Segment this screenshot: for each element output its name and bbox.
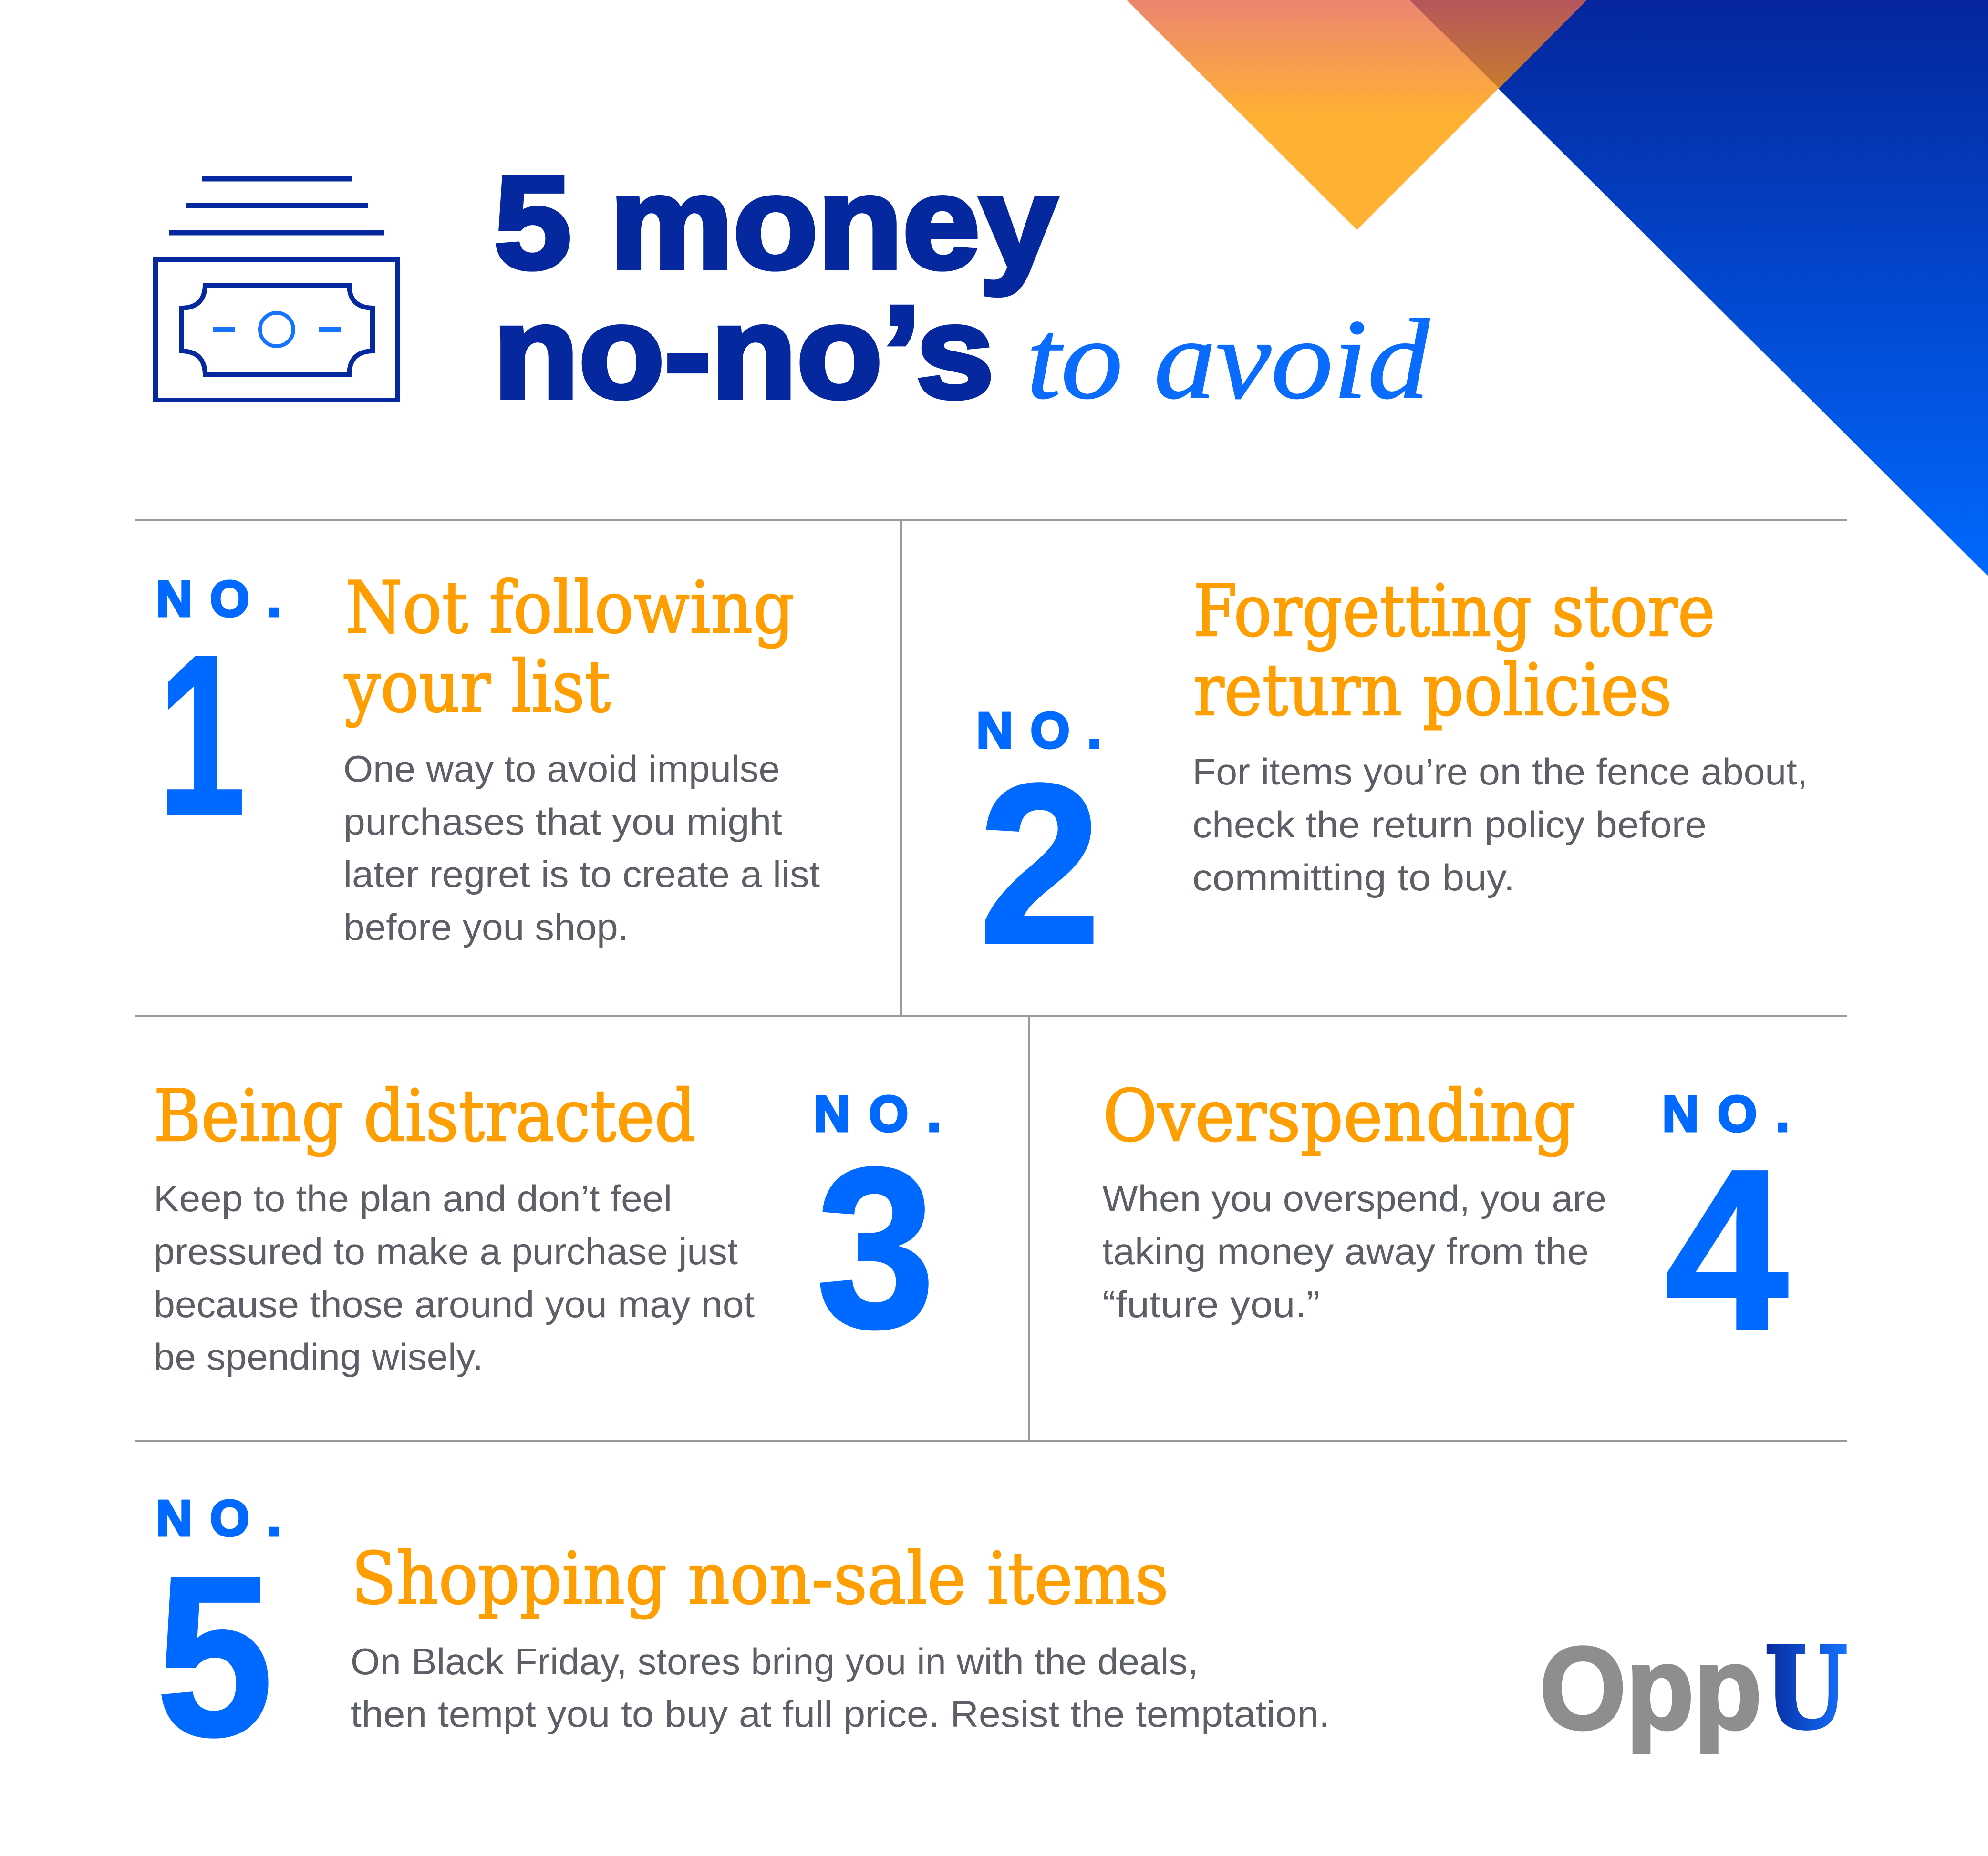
- logo: OppU: U: [1765, 1623, 1847, 1754]
- title: no-no’s: [493, 279, 994, 425]
- heading 2: return policies: [1193, 649, 1672, 732]
- body text 3: be spending wisely.: [154, 1336, 483, 1378]
- heading 1: [344, 567, 795, 729]
- body text 5: then tempt you to buy at full price. Resist the temptation.: [351, 1693, 1330, 1735]
- number label 2: 2: [979, 737, 1101, 991]
- body text 5: On Black Friday, stores bring you in with the deals,: [351, 1640, 1198, 1682]
- body text 1: before you shop.: [343, 906, 629, 948]
- heading 5: Shopping non-sale items: [352, 1537, 1169, 1620]
- title: [493, 150, 1430, 425]
- heading 2: [1193, 570, 1715, 732]
- panel: no. 3: [154, 1075, 941, 1378]
- number label 1: NO.: [156, 571, 281, 627]
- number label 1: 1: [158, 608, 245, 863]
- title: 5 money: [494, 150, 1058, 297]
- body text 3: [154, 1177, 755, 1378]
- body text 3: pressured to make a purchase just: [154, 1230, 738, 1272]
- number label 5: 5: [156, 1529, 273, 1784]
- body text 1: purchases that you might: [343, 801, 782, 843]
- body text 4: [1102, 1177, 1606, 1325]
- body text 2: check the return policy before: [1192, 804, 1707, 846]
- icon: stack of money: [155, 179, 398, 400]
- number label 3: NO.: [814, 1086, 941, 1142]
- heading 4: Overspending: [1103, 1075, 1575, 1158]
- body text 1: [343, 748, 820, 948]
- body text 2: [1192, 751, 1808, 898]
- heading 1: Not following: [345, 567, 795, 650]
- body text 4: “future you.”: [1102, 1283, 1320, 1325]
- heading 3: Being distracted: [154, 1075, 696, 1158]
- body text 4: When you overspend, you are: [1102, 1177, 1606, 1219]
- heading 1: your list: [344, 646, 611, 729]
- number label 5: NO.: [156, 1490, 281, 1547]
- body text 3: because those around you may not: [154, 1283, 755, 1325]
- panel: no. 5: [156, 1490, 1330, 1784]
- corner triangles decoration: [1127, 0, 1988, 576]
- panel: no. 2: [976, 570, 1808, 991]
- body text 5: [351, 1640, 1330, 1735]
- heading 2: Forgetting store: [1193, 570, 1715, 653]
- number label 3: 3: [817, 1121, 935, 1375]
- body text 1: later regret is to create a list: [343, 853, 820, 895]
- body text 4: taking money away from the: [1102, 1230, 1589, 1272]
- body text 2: committing to buy.: [1192, 856, 1515, 898]
- logo: OppU: Opp: [1540, 1623, 1762, 1754]
- panel: no. 1: [156, 567, 820, 948]
- panel: no. 4: [1102, 1075, 1790, 1377]
- number label 2: NO.: [976, 702, 1101, 759]
- body text 3: Keep to the plan and don’t feel: [154, 1177, 672, 1219]
- grid divider lines: [135, 520, 1847, 1441]
- title: to avoid: [1026, 296, 1430, 423]
- body text 2: For items you’re on the fence about,: [1192, 751, 1808, 793]
- body text 1: One way to avoid impulse: [343, 748, 780, 790]
- number label 4: 4: [1665, 1123, 1790, 1377]
- number label 4: NO.: [1662, 1086, 1790, 1142]
